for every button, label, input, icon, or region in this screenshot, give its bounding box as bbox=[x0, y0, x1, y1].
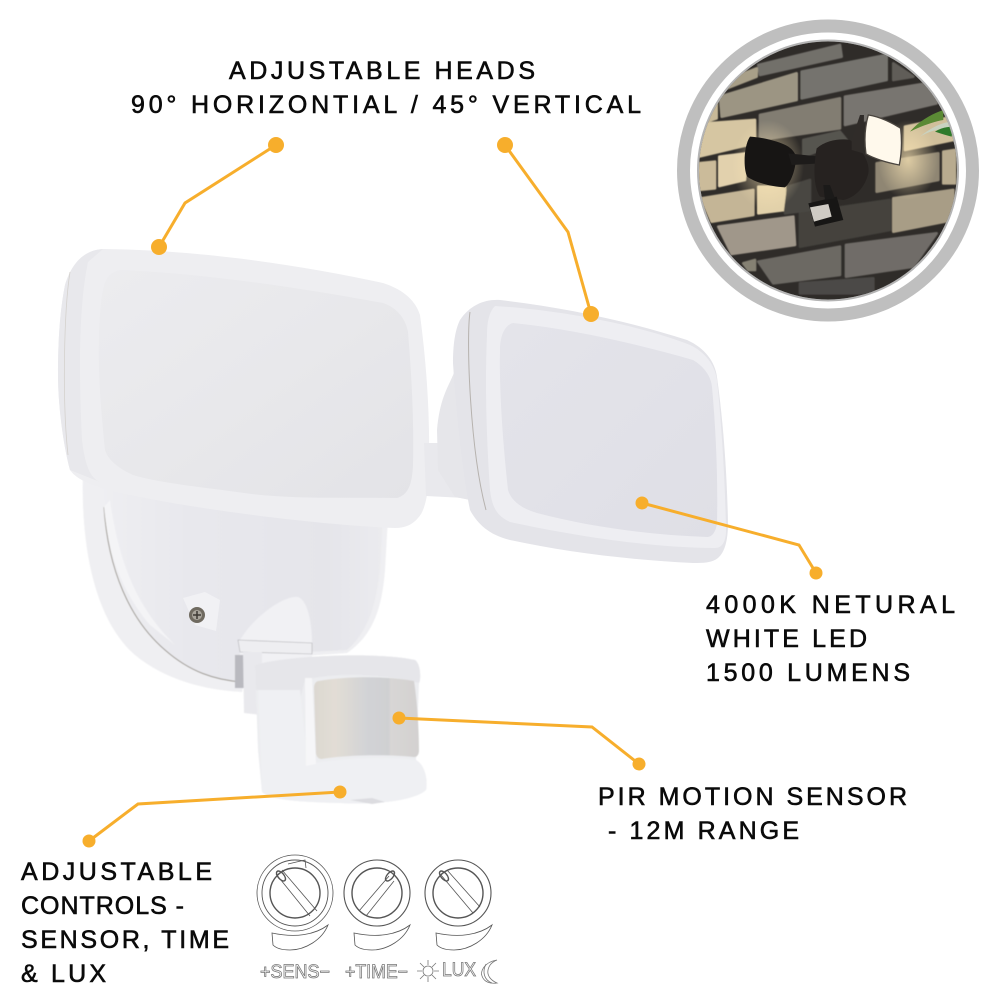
photo clip bbox=[699, 42, 957, 300]
left lamp head bbox=[58, 249, 429, 528]
label: time: +TIME− bbox=[345, 962, 408, 983]
left lamp lens bbox=[99, 270, 413, 498]
heading: adjustable heads: 90° HORIZONTIAL / 45° VERTICAL bbox=[131, 91, 641, 119]
label: sens: +SENS− bbox=[260, 962, 330, 983]
arm connecting the heads bbox=[424, 443, 465, 498]
callout text: adjustable controls: CONTROLS - bbox=[21, 892, 184, 920]
sensor swivel neck bbox=[235, 597, 312, 715]
inset photo: light at night on brick wall bbox=[684, 26, 972, 315]
right lamp head bbox=[437, 300, 728, 563]
callout line: PIR sensor bbox=[392, 712, 646, 770]
motion sensor housing bbox=[255, 655, 427, 804]
callout line: left head bbox=[151, 137, 284, 255]
callout text: adjustable controls: ADJUSTABLE bbox=[21, 858, 212, 886]
wall mount back plate and body bbox=[83, 470, 389, 692]
black fixture in photo bbox=[745, 115, 901, 227]
callout text: adjustable controls bbox=[21, 858, 229, 988]
icon: sun bbox=[417, 960, 439, 982]
PIR lens bbox=[314, 677, 419, 759]
icon: lux dial bbox=[425, 860, 492, 950]
icon: sensitivity dial bbox=[257, 855, 333, 950]
callout text: adjustable controls: SENSOR, TIME bbox=[21, 926, 229, 954]
mounting screw bbox=[183, 592, 220, 631]
callout text: PIR sensor: PIR MOTION SENSOR bbox=[598, 783, 907, 811]
callout line: right head bbox=[497, 137, 599, 322]
plant leaves bbox=[910, 110, 953, 137]
callout text: adjustable controls: & LUX bbox=[21, 960, 106, 988]
callout line: controls bbox=[82, 786, 346, 848]
heading: adjustable heads bbox=[131, 57, 641, 119]
callout text: LED specification: 4000K NETURAL bbox=[706, 591, 955, 619]
product: white twin-head floodlight bbox=[58, 249, 728, 804]
callout line: LED bbox=[636, 496, 822, 580]
callout text: LED specification bbox=[706, 591, 955, 687]
inner thin ring bbox=[698, 40, 958, 300]
icon: moon bbox=[482, 960, 497, 983]
callout text: PIR sensor: - 12M RANGE bbox=[608, 817, 799, 845]
heading: adjustable heads: ADJUSTABLE HEADS bbox=[229, 57, 535, 85]
right lamp lens bbox=[500, 323, 717, 537]
outer grey ring bbox=[684, 26, 972, 315]
callout text: LED specification: 1500 LUMENS bbox=[706, 659, 910, 687]
icon: time dial bbox=[344, 860, 410, 950]
callout text: PIR sensor bbox=[598, 783, 907, 845]
label: lux: LUX bbox=[442, 960, 476, 981]
callout text: LED specification: WHITE LED bbox=[706, 625, 867, 653]
